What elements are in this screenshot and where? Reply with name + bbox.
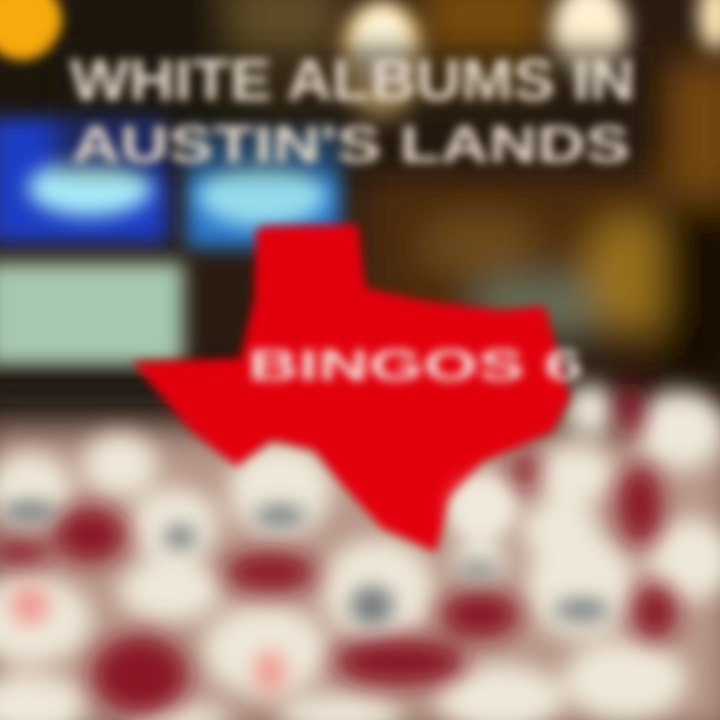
ceiling lights and orange sign: [0, 0, 720, 120]
pink ball numbers: [10, 585, 286, 694]
screens: blue panels: [0, 118, 341, 248]
grey ball shading: [2, 501, 610, 626]
title text: [70, 48, 635, 174]
dark red ball accents: [0, 382, 677, 715]
white balls: [0, 384, 720, 720]
bingo balls field: [0, 382, 720, 720]
banner text on Texas: BINGOS 6: [248, 341, 583, 390]
title: [56, 46, 646, 174]
red Texas map: [132, 224, 570, 552]
screen: green panel: [0, 262, 184, 366]
ball overlapping Texas coast: [452, 480, 512, 536]
title line 2: AUSTIN'S LANDS: [72, 116, 630, 174]
title shadow: [56, 46, 646, 172]
title line 1: WHITE ALBUMS IN: [70, 48, 635, 113]
